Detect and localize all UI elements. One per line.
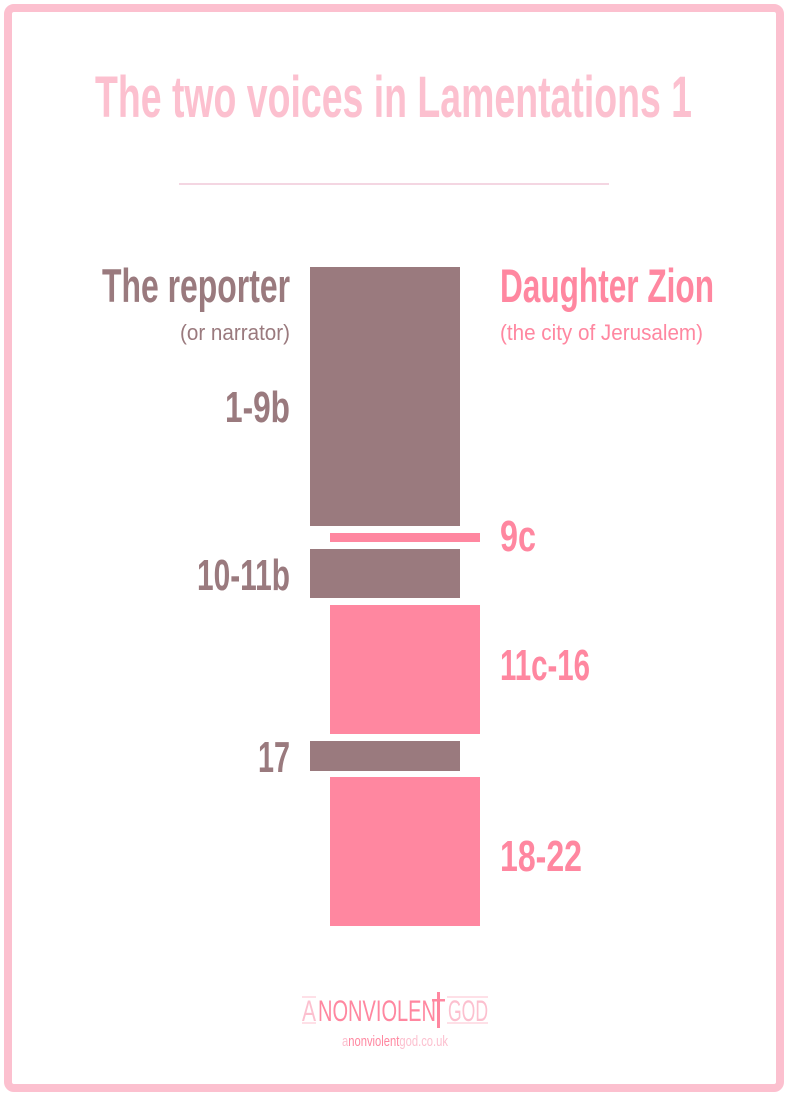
heading: the reporter bbox=[102, 259, 290, 345]
label: 1-9b: 1-9b bbox=[225, 383, 290, 432]
logo: NONVIOLEN bbox=[318, 995, 436, 1028]
logo bbox=[302, 992, 488, 1050]
bar: zion 11c-16 bbox=[330, 605, 480, 734]
bar chart: voice segments bbox=[310, 267, 480, 926]
label: 17: 17 bbox=[258, 733, 290, 782]
logo: anonviolentgod.co.uk bbox=[342, 1033, 448, 1050]
bar: zion 18-22 bbox=[330, 777, 480, 926]
bar: reporter 10-11b bbox=[310, 549, 460, 598]
logo: GOD bbox=[448, 995, 488, 1028]
bar: reporter 1-9b bbox=[310, 267, 460, 526]
label: 11c-16: 11c-16 bbox=[500, 641, 590, 690]
heading: the reporter: (or narrator) bbox=[180, 320, 290, 345]
bar: zion 9c bbox=[330, 533, 480, 542]
label: 10-11b: 10-11b bbox=[197, 551, 290, 600]
heading: daughter zion: (the city of Jerusalem) bbox=[500, 320, 703, 345]
bar: reporter 17 bbox=[310, 741, 460, 771]
heading: the reporter: The reporter bbox=[102, 259, 290, 312]
label: 9c: 9c bbox=[500, 512, 536, 561]
label: 18-22: 18-22 bbox=[500, 832, 582, 881]
heading: daughter zion bbox=[500, 259, 714, 345]
logo: A bbox=[302, 995, 316, 1028]
